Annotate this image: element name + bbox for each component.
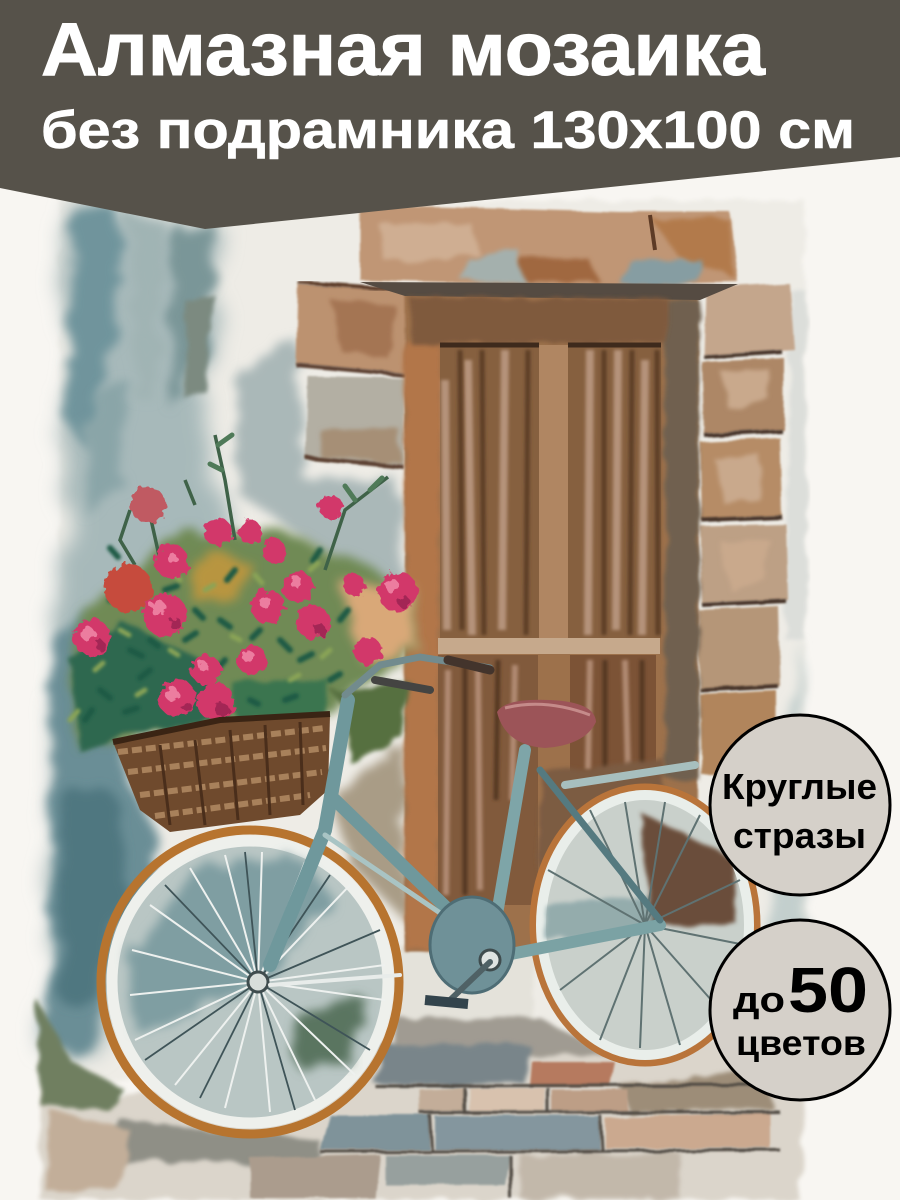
- badge: up to 50 colours: цветов: [736, 1024, 866, 1063]
- right wall stones: [698, 284, 795, 775]
- door upper panels: [440, 345, 661, 638]
- badge: round rhinestones: [710, 715, 890, 895]
- painting: watercolor scene: [38, 200, 806, 1200]
- top banner: [0, 0, 900, 229]
- rear bicycle wheel: [533, 787, 757, 1063]
- front bicycle wheel: [101, 830, 399, 1134]
- door: [360, 282, 738, 952]
- badge: up to 50 colours: до: [733, 979, 785, 1020]
- flower bouquet: [70, 435, 420, 765]
- foliage: [70, 435, 420, 765]
- pink blooms: [73, 487, 418, 721]
- cobblestone ground: [38, 1000, 805, 1200]
- title line 2: без подрамника 130х100 см: [41, 101, 855, 160]
- chainring: [430, 897, 514, 993]
- badge: up to 50 colours: 50: [788, 954, 868, 1026]
- lintel stone: [360, 206, 738, 286]
- badge: round rhinestones: Круглые: [722, 766, 877, 807]
- title line 1: Алмазная мозаика: [41, 7, 766, 91]
- handlebar: [345, 657, 490, 695]
- bicycle saddle: [497, 700, 596, 748]
- badge: up to 50 colours: [710, 920, 890, 1100]
- left wall stones: [296, 282, 408, 467]
- badge: round rhinestones: стразы: [733, 815, 866, 856]
- door lower panels: [438, 655, 656, 905]
- wall wash: [48, 200, 806, 1080]
- wicker basket: [113, 714, 330, 832]
- bicycle frame: [270, 657, 695, 1004]
